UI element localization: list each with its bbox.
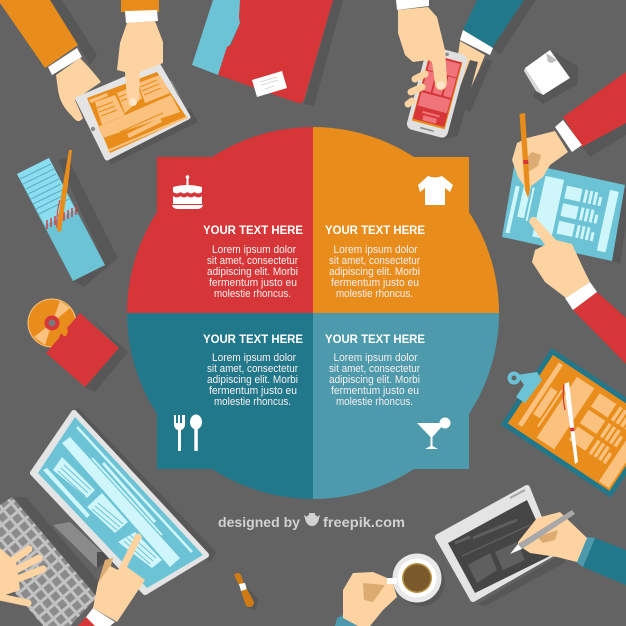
text block: orange quadrant xyxy=(325,223,425,300)
white cuff xyxy=(396,0,429,10)
white pen xyxy=(563,382,578,464)
stylus tip xyxy=(510,544,522,554)
blue document xyxy=(502,161,626,264)
hand typing on keyboard xyxy=(0,548,43,603)
folder blue tab xyxy=(192,0,242,75)
text block: red quadrant: fermentum justo eu xyxy=(209,277,297,289)
text block: red quadrant: molestie rhoncus. xyxy=(214,288,291,300)
footer credit: freepik xyxy=(218,513,405,530)
text block: light teal quadrant: sit amet, consectetur xyxy=(329,363,420,375)
icon: t-shirt xyxy=(418,176,453,205)
orange pen xyxy=(520,113,530,198)
hand holding cup xyxy=(335,572,397,626)
hand pointing at laptop xyxy=(78,533,145,626)
tablet with dark screen xyxy=(438,488,566,606)
disc xyxy=(28,298,76,348)
laptop screen xyxy=(33,408,216,592)
note paper xyxy=(524,50,578,104)
folder xyxy=(192,0,343,106)
text block: orange quadrant: fermentum justo eu xyxy=(331,277,419,289)
fingers on phone edge xyxy=(408,74,425,104)
fingertip xyxy=(437,81,445,89)
red sleeve xyxy=(46,313,119,387)
text block: orange quadrant: adipiscing elit. Morbi xyxy=(329,266,420,278)
frame xyxy=(33,413,206,592)
sleeve shadow xyxy=(50,0,97,65)
clipboard sheet xyxy=(508,355,626,491)
hand xyxy=(529,217,590,298)
teal sleeve xyxy=(335,615,358,626)
text block: dark teal quadrant: fermentum justo eu xyxy=(209,385,297,397)
text block: dark teal quadrant: sit amet, consectetur xyxy=(207,363,298,375)
white cuff xyxy=(48,48,82,75)
footer credit: freepik: designed by xyxy=(218,514,300,530)
hand xyxy=(56,58,101,121)
hand xyxy=(117,21,163,103)
quadrant: orange xyxy=(313,127,499,313)
fingertip xyxy=(129,98,137,106)
text block: light teal quadrant: YOUR TEXT HERE xyxy=(325,332,425,346)
text block: light teal quadrant: adipiscing elit. Morbi xyxy=(329,374,420,386)
hand with red sleeve writing xyxy=(512,72,626,198)
coffee xyxy=(402,563,432,593)
hand with teal sleeve holding phone xyxy=(456,0,536,112)
text block: orange quadrant: YOUR TEXT HERE xyxy=(325,223,425,237)
quadrant: red xyxy=(127,127,313,313)
clipboard xyxy=(501,348,626,498)
icon: martini glass xyxy=(417,417,451,449)
hand touching tablet from top xyxy=(117,0,163,106)
clip xyxy=(510,372,542,403)
text block: red quadrant: YOUR TEXT HERE xyxy=(203,223,303,237)
display xyxy=(38,417,203,588)
text block: dark teal quadrant: molestie rhoncus. xyxy=(214,396,291,408)
text block: dark teal quadrant: Lorem ipsum dolor xyxy=(212,352,296,364)
teal sleeve xyxy=(463,0,524,48)
hand with red sleeve pointing at document xyxy=(529,217,626,364)
text block: red quadrant: sit amet, consectetur xyxy=(207,255,298,267)
USB drive xyxy=(234,573,258,610)
saucer xyxy=(392,554,442,602)
white cuff xyxy=(555,120,582,152)
arm sleeve xyxy=(0,0,78,68)
footer credit: freepik: freepik.com xyxy=(323,514,405,530)
notebook xyxy=(17,150,118,287)
icon: fork and spoon xyxy=(174,414,202,451)
orange pencil xyxy=(57,150,72,232)
hand xyxy=(512,131,568,190)
stylus xyxy=(518,510,575,549)
speaker slot xyxy=(510,490,525,498)
coffee cup and saucer xyxy=(392,554,445,606)
tablet screen xyxy=(448,500,552,593)
spiral xyxy=(47,206,76,229)
tablet screen xyxy=(87,72,187,153)
hand with orange sleeve touching tablet xyxy=(0,0,101,121)
text block: orange quadrant: molestie rhoncus. xyxy=(336,288,413,300)
speaker slot xyxy=(171,81,179,96)
hand xyxy=(398,7,447,90)
white cuff xyxy=(460,30,493,55)
quadrant: dark teal xyxy=(127,313,313,499)
text block: red quadrant: adipiscing elit. Morbi xyxy=(207,266,298,278)
text block: light teal quadrant: Lorem ipsum dolor xyxy=(334,352,418,364)
home button xyxy=(91,127,95,131)
thumb xyxy=(98,558,113,590)
text block: red quadrant xyxy=(203,223,303,300)
white cuff xyxy=(86,608,115,626)
folder red body xyxy=(218,0,333,103)
sleeve cuff xyxy=(576,537,595,567)
text block: red quadrant: Lorem ipsum dolor xyxy=(212,244,296,256)
hand xyxy=(343,572,397,626)
keyboard xyxy=(0,497,97,626)
text block: dark teal quadrant xyxy=(203,332,303,408)
teal sleeve xyxy=(583,538,626,585)
clipboard board xyxy=(501,348,626,498)
hand with stylus xyxy=(510,510,626,585)
palm xyxy=(456,41,485,107)
text block: light teal quadrant: molestie rhoncus. xyxy=(336,396,413,408)
text block: dark teal quadrant: YOUR TEXT HERE xyxy=(203,332,303,346)
business card xyxy=(252,71,287,97)
white cuff xyxy=(565,282,597,310)
ruled lines xyxy=(20,164,69,214)
text block: orange quadrant: sit amet, consectetur xyxy=(329,255,420,267)
pen band xyxy=(523,160,528,164)
icon: freepik logo xyxy=(304,513,320,526)
hand xyxy=(518,512,587,562)
quadrant: light teal xyxy=(313,313,499,499)
hand pressing phone xyxy=(396,0,447,90)
red sleeve xyxy=(78,617,110,626)
orange sleeve xyxy=(121,0,159,12)
tablet body xyxy=(78,65,188,158)
phone xyxy=(406,45,478,140)
text block: light teal quadrant: fermentum justo eu xyxy=(331,385,419,397)
hand xyxy=(93,533,145,622)
cup handle xyxy=(387,578,397,584)
icon: birthday cake xyxy=(172,175,203,209)
CD and red sleeve xyxy=(28,298,128,392)
red sleeve xyxy=(563,72,626,147)
central circular chart xyxy=(127,127,499,499)
tablet body xyxy=(438,488,553,599)
text block: light teal quadrant xyxy=(325,332,425,408)
text block: orange quadrant: Lorem ipsum dolor xyxy=(334,244,418,256)
text block: dark teal quadrant: adipiscing elit. Morbi xyxy=(207,374,298,386)
red sleeve xyxy=(573,292,626,364)
keyboard shadow xyxy=(14,497,110,600)
white cuff xyxy=(125,10,158,23)
monitor stand xyxy=(53,522,108,568)
tablet with orange screen xyxy=(78,65,198,165)
